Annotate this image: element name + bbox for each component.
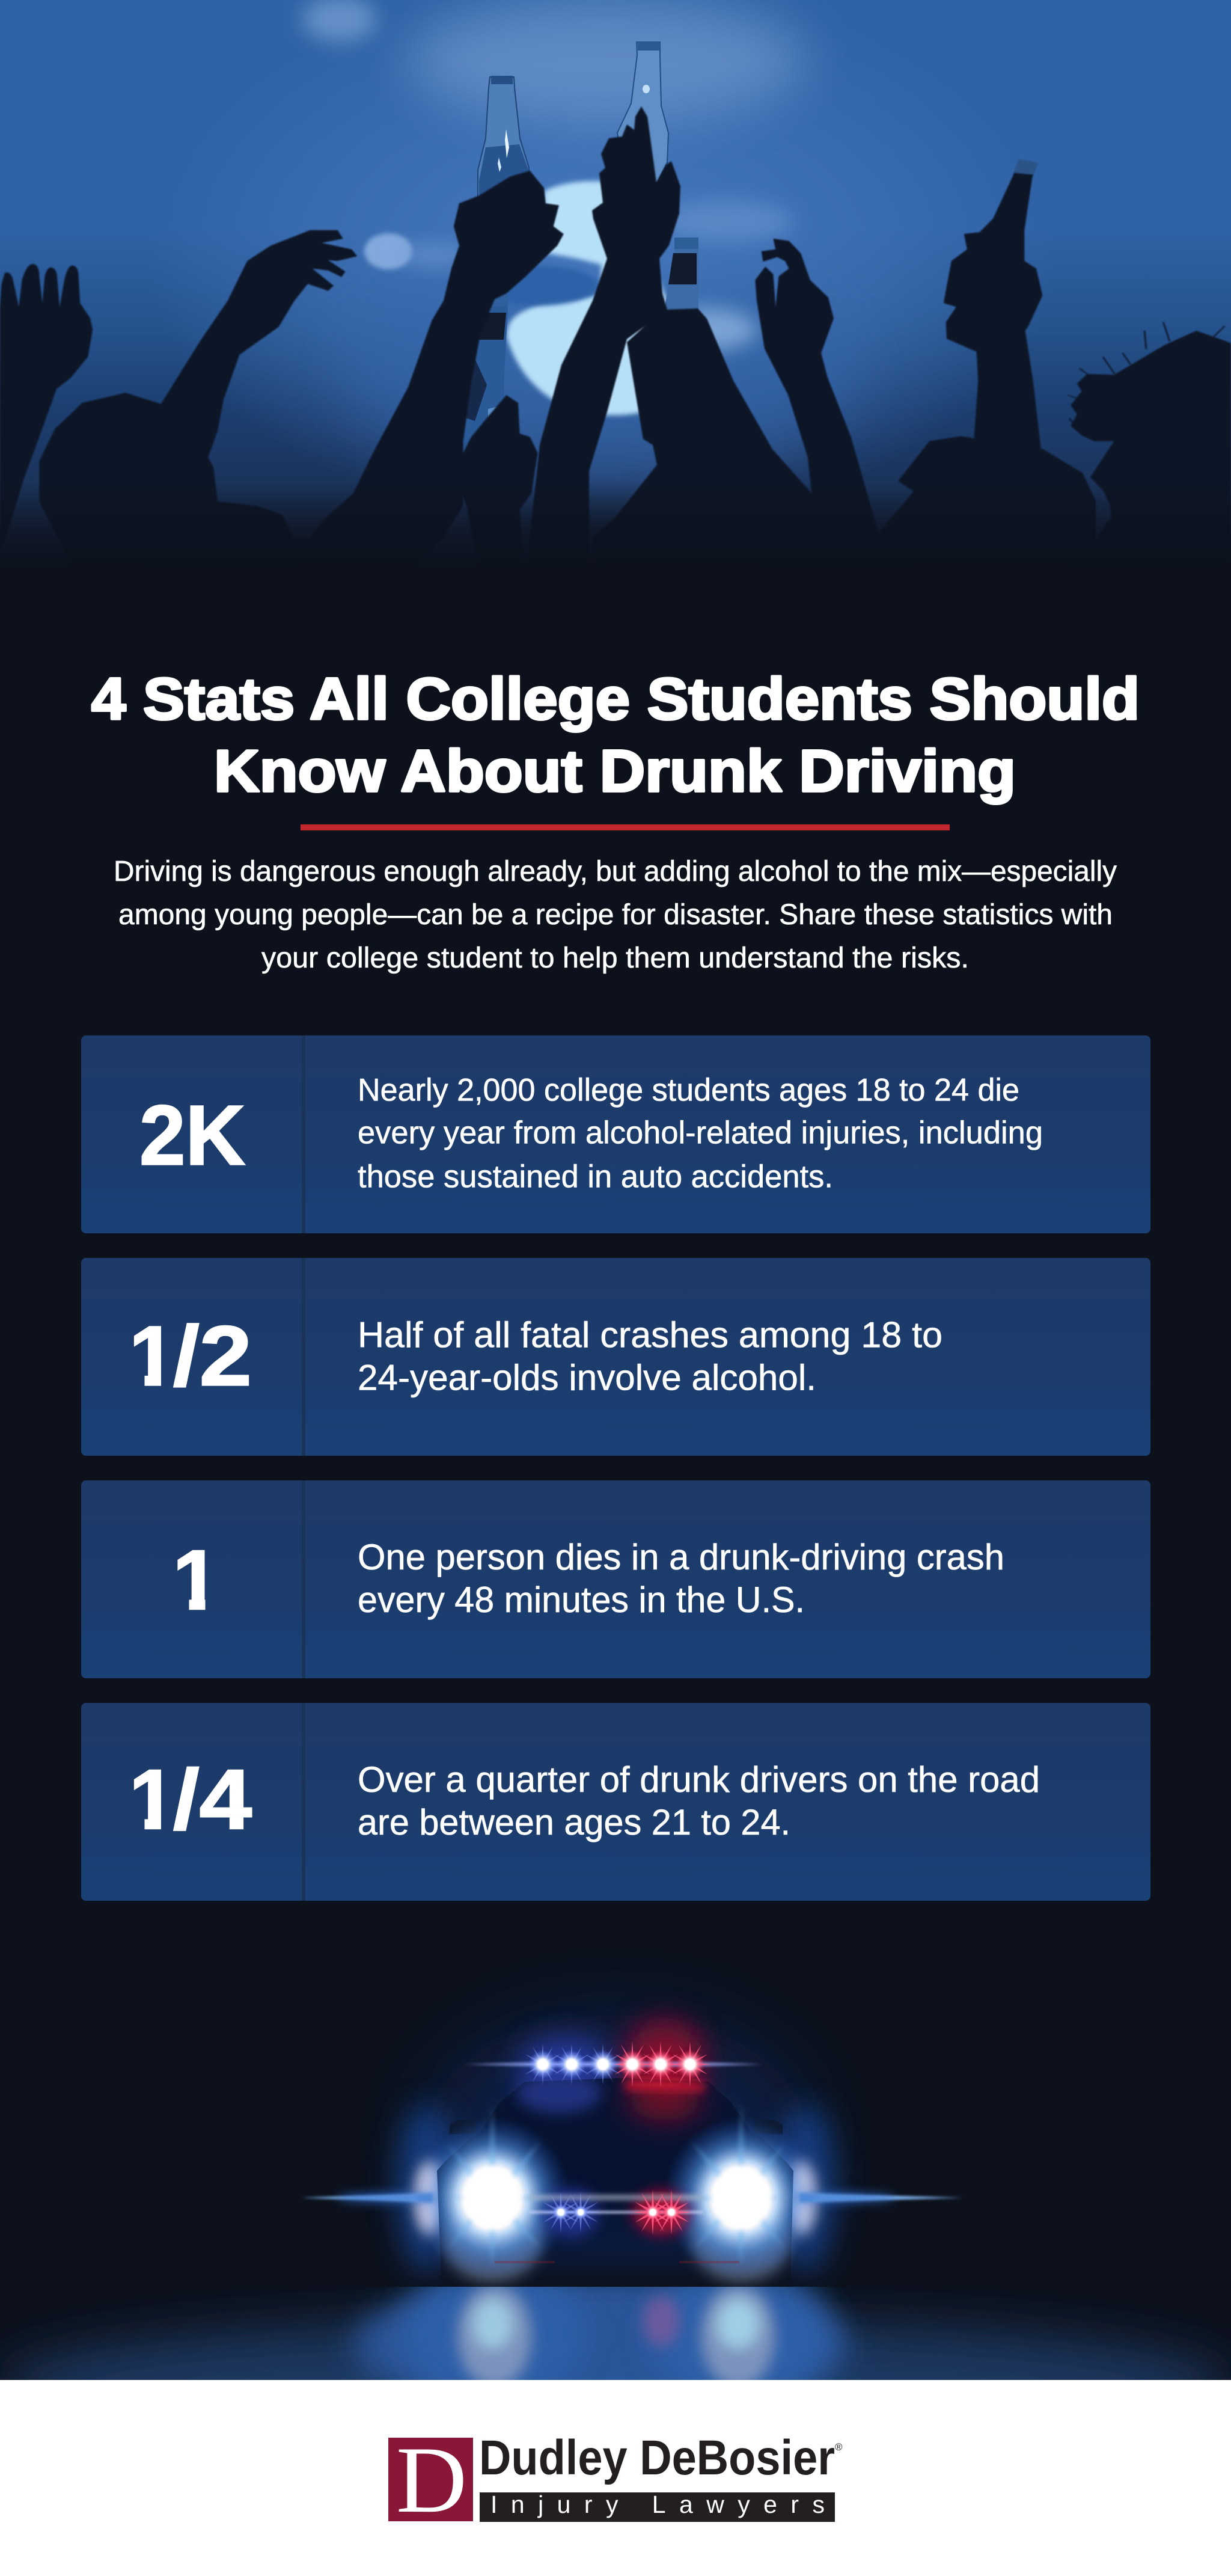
- registered mark: ®: [835, 2441, 843, 2453]
- bottle: center upper: [617, 42, 668, 183]
- stat card 3: 1: [81, 1480, 1150, 1678]
- stat card 3: 1: every 48 minutes in the U.S.: [358, 1580, 805, 1620]
- silhouette: left hand: [0, 264, 93, 553]
- right headlight: [655, 2105, 819, 2282]
- intro paragraph: among young people—can be a recipe for disaster. Share these statistics with: [118, 899, 1113, 931]
- wide blue halo behind car: [397, 2014, 835, 2273]
- title: [91, 666, 1140, 805]
- silhouette: person with arms raised: [39, 171, 564, 601]
- silhouette: lower hand: [454, 395, 538, 575]
- intro paragraph: your college student to help them understand the risks.: [261, 942, 969, 974]
- silhouette: center hand and arm: [526, 106, 680, 571]
- car body silhouette: [437, 2078, 793, 2288]
- stat card 1: 2K: 2K: [139, 1087, 245, 1182]
- red bumper strips: [495, 2261, 739, 2263]
- title: 4 Stats All College Students Should: [91, 666, 1140, 732]
- hero photo: raised hands and bottles against moon: [0, 0, 1231, 545]
- stat card 2: 1/2: /2: [173, 1308, 252, 1403]
- footer white band: [0, 2380, 1231, 2576]
- stat card 2: 1/2: [81, 1258, 1150, 1456]
- logo mark: red square with D: D: [396, 2429, 467, 2532]
- bottle: right of center: [664, 238, 698, 310]
- silhouette: second center arm: [593, 308, 879, 601]
- red divider under title: [301, 824, 950, 830]
- bottle: left upper: [478, 76, 530, 207]
- hazy clouds at top: [302, 0, 805, 351]
- stat card 3: 1: 1: [173, 1532, 219, 1627]
- stat card 1: 2K: Nearly 2,000 college students ages 18 to 24 die: [358, 1072, 1019, 1108]
- stat card 2: 1/2: Half of all fatal crashes among 18 to: [358, 1314, 942, 1355]
- logo black bar with tagline: Injury Lawyers: [490, 2491, 825, 2518]
- road reflection: [0, 2287, 1231, 2380]
- stat card 4: 1/4: are between ages 21 to 24.: [358, 1802, 790, 1842]
- stat card 2: 1/2: 24-year-olds involve alcohol.: [358, 1357, 816, 1397]
- title: Know About Drunk Driving: [214, 738, 1016, 804]
- silhouette: open hand right of center: [755, 239, 878, 601]
- stat card 3: 1: One person dies in a drunk-driving crash: [358, 1537, 1004, 1577]
- stat card 4: 1/4: Over a quarter of drunk drivers on the road: [358, 1759, 1040, 1800]
- grille glow lights: [529, 2182, 703, 2242]
- intro paragraph: [114, 856, 1117, 974]
- logo: Dudley DeBosier Injury Lawyers: [388, 2429, 843, 2532]
- stat card 1: 2K: every year from alcohol-related injuries, including: [358, 1115, 1043, 1150]
- roof light bar: [465, 2034, 763, 2094]
- stat card 4: 1/4: [81, 1703, 1150, 1901]
- horizontal headlight flare: [301, 2192, 963, 2203]
- silhouette: person behind, right: [878, 436, 1096, 601]
- stat card 1: 2K: [81, 1035, 1150, 1233]
- bottle: lower left of center: [434, 295, 508, 493]
- stat card 1: 2K: those sustained in auto accidents.: [358, 1159, 833, 1194]
- silhouette: hand with dark bottle: [944, 159, 1044, 498]
- intro paragraph: Driving is dangerous enough already, but adding alcohol to the mix—especially: [114, 856, 1117, 888]
- glow spilling over roof: [517, 2072, 706, 2120]
- stat card 4: 1/4: /4: [173, 1752, 252, 1847]
- left headlight: [414, 2105, 577, 2282]
- crowd silhouettes: [0, 106, 1231, 601]
- stat card 4: 1/4: 1: [129, 1752, 176, 1847]
- stat card 2: 1/2: 1: [129, 1308, 176, 1403]
- police car with flashing lights: [0, 1989, 1231, 2380]
- light bar glow, blue and red: [518, 2017, 704, 2097]
- moon: [478, 181, 667, 416]
- silhouette: profile with spiky hair: [1068, 322, 1231, 601]
